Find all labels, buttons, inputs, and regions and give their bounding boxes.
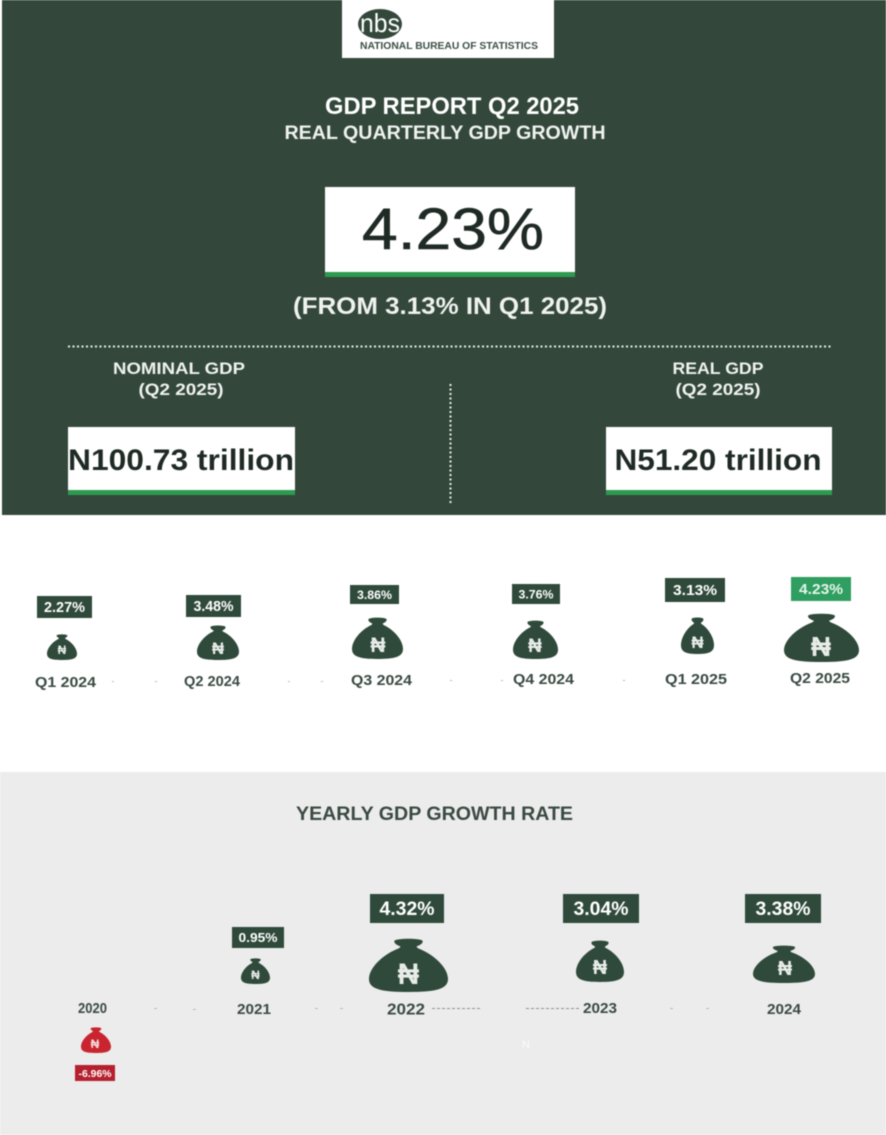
item: Q1 2024: ₦ (58, 643, 67, 657)
item: 2024: ₦ (778, 958, 793, 980)
title: GDP REPORT Q2 2025 (325, 93, 579, 120)
item: 2021: 0.95% (238, 930, 278, 945)
panel: nominal GDP (68, 359, 295, 495)
callout: headline growth rate: 4.23% (362, 197, 544, 262)
item: Q3 2024: ₦ (370, 634, 386, 657)
panel: yearly growth section: N (522, 1039, 530, 1051)
item: Q1 2025: ₦ (691, 633, 704, 652)
logo: National Bureau of Statistics: nbs (360, 8, 400, 38)
subtitle: REAL QUARTERLY GDP GROWTH (284, 123, 606, 144)
item: Q3 2024 (350, 585, 412, 689)
panel: real GDP: N51.20 trillion (614, 444, 822, 477)
panel: real GDP: REAL GDP (672, 359, 764, 378)
item: 2023: 3.04% (574, 899, 629, 920)
item: Q1 2024: 2.27% (44, 600, 85, 616)
item: 2021: 2021 (237, 1002, 271, 1018)
item: Q2 2025 highlighted: Q2 2025 (790, 671, 850, 687)
item: 2020: 2020 (78, 1001, 107, 1017)
callout: headline growth rate (325, 187, 575, 277)
item: 2024 (745, 894, 821, 1018)
logo: National Bureau of Statistics: NATIONAL BUREAU OF STATISTICS (360, 41, 538, 52)
item: 2022 (369, 894, 448, 1018)
item: Q2 2024: Q2 2024 (184, 674, 240, 690)
item: Q2 2024: ₦ (212, 639, 225, 658)
logo: National Bureau of Statistics (342, 0, 554, 58)
item: 2020 (75, 1001, 115, 1081)
item: 2022: 2022 (387, 1002, 425, 1018)
item: 2020: ₦ (91, 1037, 100, 1051)
item: 2023: ₦ (593, 957, 608, 979)
item: 2022: ₦ (398, 958, 420, 991)
item: Q2 2024 (184, 595, 241, 690)
item: 2024: 2024 (767, 1002, 801, 1018)
item: Q2 2025 highlighted: 4.23% (799, 582, 843, 598)
item: 2023 (563, 894, 639, 1017)
item: 2020: -6.96% (78, 1069, 112, 1080)
text: previous quarter comparison: (FROM 3.13% IN Q1 2025) (293, 293, 607, 320)
item: Q1 2025: 3.13% (673, 583, 717, 599)
item: 2022: 4.32% (380, 899, 435, 920)
item: Q4 2024: 3.76% (518, 588, 554, 602)
item: 2021: ₦ (251, 968, 260, 982)
panel: nominal GDP: (Q2 2025) (138, 380, 224, 399)
item: Q2 2025 highlighted (784, 577, 859, 687)
item: Q1 2025 (665, 578, 727, 688)
item: Q2 2024: 3.48% (194, 599, 234, 615)
panel: nominal GDP: N100.73 trillion (68, 444, 294, 477)
item: Q4 2024: Q4 2024 (513, 672, 574, 688)
item: Q1 2024 (35, 596, 96, 691)
panel: quarterly growth timeline (2, 515, 886, 772)
item: Q1 2024: Q1 2024 (35, 675, 96, 691)
item: Q4 2024: ₦ (528, 636, 542, 657)
panel: headline dark section (2, 0, 886, 515)
panel: real GDP: (Q2 2025) (676, 380, 760, 399)
panel: nominal GDP: NOMINAL GDP (113, 359, 245, 378)
item: Q3 2024: Q3 2024 (351, 673, 412, 689)
item: Q2 2025 highlighted: ₦ (811, 631, 831, 662)
heading: yearly GDP growth rate: YEARLY GDP GROWTH RATE (296, 804, 573, 825)
item: Q4 2024 (512, 584, 574, 688)
item: 2021 (232, 927, 284, 1018)
panel: yearly growth section (0, 772, 886, 1135)
item: 2023: 2023 (583, 1001, 617, 1017)
item: 2024: 3.38% (756, 899, 811, 920)
item: Q1 2025: Q1 2025 (665, 672, 727, 688)
item: Q3 2024: 3.86% (357, 588, 392, 602)
panel: real GDP (606, 359, 832, 495)
